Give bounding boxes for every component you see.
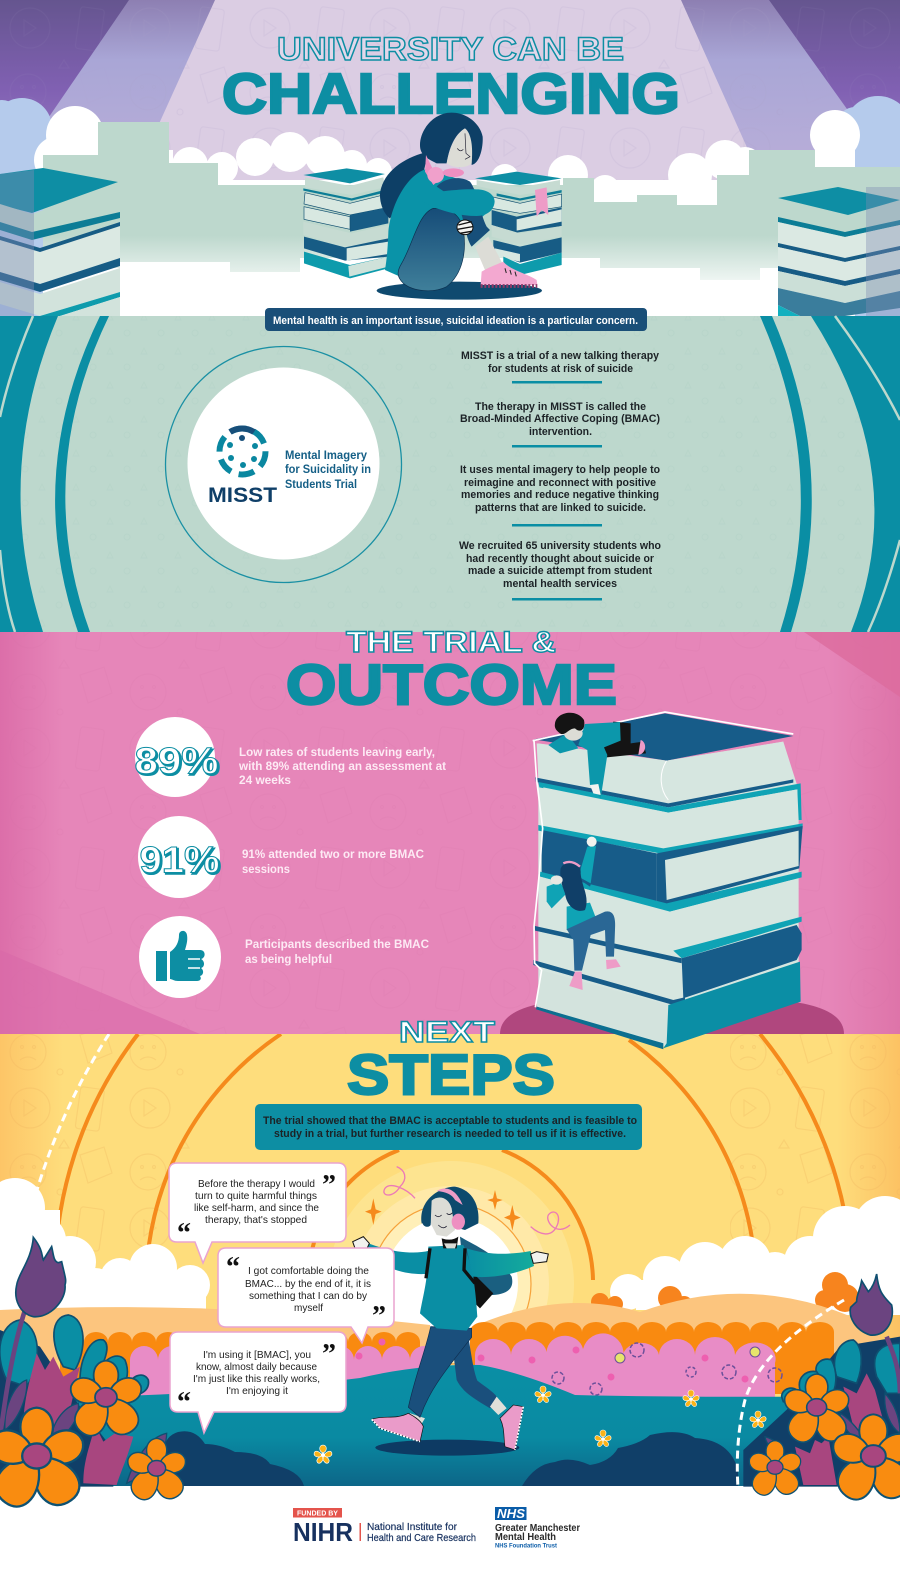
book 5	[533, 925, 802, 1005]
book stack left	[0, 168, 120, 316]
book 4	[540, 872, 802, 958]
callout: mental health banner: Mental health is an important issue, suicidal ideation is a particular concern.	[273, 315, 638, 327]
quote bubble 1: self-harm stopped	[169, 1163, 346, 1263]
sparkles	[365, 1190, 521, 1231]
orange scallops	[60, 1322, 834, 1394]
orange rainbow arcs	[55, 1034, 852, 1290]
quote bubble 1: self-harm stopped: turn to quite harmful things	[195, 1191, 317, 1202]
callout: mental health banner	[265, 308, 647, 331]
rear leg	[453, 1337, 497, 1408]
plants: right corner flowers	[743, 1274, 900, 1506]
text: attendance: 91% attended two or more BMAC	[242, 849, 424, 861]
text block: recruitment: We recruited 65 university students who	[459, 540, 661, 552]
logo tagline: for Suicidality in	[285, 464, 371, 476]
pink squiggles	[384, 1167, 570, 1234]
book 3	[542, 826, 803, 905]
quote bubble 2: doing BMAC alone: BMAC... by the end of it, it is	[245, 1279, 371, 1290]
small meadow flowers	[552, 1343, 782, 1395]
text: low rates: with 89% attending an assessment at	[238, 761, 446, 773]
leaves	[782, 1340, 900, 1402]
text block: what MISST is: for students at risk of suicide	[488, 363, 633, 375]
text: low rates: 24 weeks	[239, 775, 291, 787]
logo: NHS Greater Manchester: Mental Health	[495, 1531, 556, 1543]
panel: next steps background	[0, 1034, 900, 1489]
white footer background	[0, 1486, 900, 1589]
text block: mental imagery: It uses mental imagery to help people to	[460, 464, 660, 476]
outer thin ring	[166, 346, 402, 582]
text: helpful: Participants described the BMAC	[245, 939, 429, 951]
circle with 89%: 89%	[134, 740, 218, 782]
illustration: walking girl with headphones	[353, 1167, 570, 1456]
logo wordmark: MISST	[208, 484, 277, 507]
callout: next steps conclusion: The trial showed that the BMAC is acceptable to students and is feasible to	[263, 1115, 637, 1127]
logo: NIHR funded by	[293, 1508, 476, 1547]
callout: next steps conclusion	[255, 1104, 642, 1150]
pink background	[0, 632, 900, 1034]
logo tagline: Mental Imagery	[285, 450, 368, 462]
quote bubble 1: self-harm stopped: “	[177, 1218, 191, 1249]
callout: next steps conclusion: study in a trial, but further research is needed to tell us if it is effective.	[274, 1128, 626, 1140]
circle with thumbs up icon	[139, 916, 221, 998]
head	[421, 1187, 479, 1230]
quote bubble 3: daily use: know, almost daily because	[196, 1362, 317, 1373]
purple leaves	[5, 1380, 167, 1483]
magenta spiky plants	[23, 1353, 133, 1485]
tulip	[850, 1274, 900, 1393]
central spotlight beam	[120, 0, 775, 210]
backpack	[473, 1273, 493, 1308]
pale city skyline	[43, 122, 900, 280]
hair behind	[460, 1237, 512, 1295]
student lying on top book	[548, 713, 646, 798]
quote bubble 3: daily use: ”	[322, 1339, 336, 1370]
illustration: stack of books with climbing students	[533, 712, 803, 1049]
text block: the BMAC therapy	[460, 401, 660, 438]
book 2	[538, 782, 803, 854]
logo: NHS Greater Manchester	[495, 1507, 580, 1550]
book 6	[536, 962, 801, 1049]
circle with 91%: 91%	[141, 841, 221, 882]
circle with 91%	[138, 816, 221, 898]
white edge highlights	[533, 712, 793, 1007]
shoes	[372, 1413, 423, 1442]
white clouds	[34, 106, 860, 316]
text block: recruitment: had recently thought about suicide or	[466, 553, 655, 565]
logo tagline: Students Trial	[285, 479, 357, 491]
dashed path, lower	[737, 1300, 844, 1488]
right teal arcs	[760, 316, 900, 632]
panel: trial and outcome	[0, 632, 900, 1034]
sun glow rings	[328, 1161, 574, 1407]
logo: NHS Greater Manchester: Greater Manchester	[495, 1522, 580, 1534]
text block: what MISST is: MISST is a trial of a new talking therapy	[461, 350, 660, 362]
clouds	[0, 1178, 900, 1315]
title: challenging: CHALLENGING	[222, 62, 680, 126]
book stack behind girl, right	[475, 172, 562, 275]
yellow background	[0, 1034, 900, 1489]
circle with 89%	[134, 717, 220, 797]
quote bubble 2: doing BMAC alone: something that I can do by	[249, 1291, 368, 1302]
panel: footer	[0, 1486, 900, 1589]
ground shadow	[375, 1440, 519, 1456]
illustration: sitting girl with books	[303, 113, 562, 300]
logo: NHS Greater Manchester: NHS	[497, 1507, 526, 1521]
text: attendance	[242, 849, 424, 876]
book 1	[534, 713, 793, 807]
plants: left corner flowers	[0, 1237, 188, 1514]
quote bubble 1: self-harm stopped: like self-harm, and since the	[194, 1203, 319, 1214]
tulip	[0, 1237, 66, 1437]
quote bubble 1: self-harm stopped: Before the therapy I would	[198, 1179, 315, 1190]
peach hills	[0, 1294, 880, 1360]
plinth shadow under books	[500, 999, 844, 1034]
quote bubble 3: daily use: “	[177, 1387, 191, 1418]
text block: mental imagery: patterns that are linked to suicide.	[475, 502, 646, 514]
dashed path, upper	[34, 1034, 109, 1200]
heading: steps: STEPS	[347, 1043, 555, 1107]
text block: mental imagery: reimagine and reconnect with positive	[464, 477, 656, 489]
quote bubble 1: self-harm stopped: therapy, that's stopped	[205, 1215, 307, 1226]
hands	[353, 1237, 548, 1263]
icon: pink bookmark	[535, 187, 548, 217]
quote bubble 3: daily use	[170, 1332, 346, 1433]
outer spotlight beam	[40, 0, 862, 240]
front leg	[408, 1327, 472, 1417]
panel background	[0, 316, 900, 632]
dark bushes	[164, 1431, 738, 1486]
quote bubble 2: doing BMAC alone: I got comfortable doing the	[248, 1266, 369, 1277]
purple leaves	[765, 1393, 900, 1457]
pink scallops	[130, 1333, 776, 1405]
logo: NIHR funded by: NIHR	[293, 1517, 353, 1547]
quote bubble 3: daily use: I'm using it [BMAC], you	[203, 1350, 311, 1361]
text: low rates: Low rates of students leaving early,	[239, 747, 435, 759]
orange bush patches	[591, 1272, 859, 1314]
socks	[408, 1397, 507, 1427]
magenta spiky plants	[795, 1373, 887, 1485]
quote bubble 3: daily use: I'm enjoying it	[226, 1386, 288, 1397]
quote bubble 2: doing BMAC alone	[218, 1248, 394, 1343]
teal ground	[0, 1365, 900, 1486]
leaves	[0, 1315, 149, 1394]
student climbing the stack	[547, 837, 621, 990]
logo: NIHR funded by: Health and Care Research	[367, 1532, 476, 1544]
left arm	[365, 1243, 429, 1274]
circle with 89%: 89%	[136, 742, 220, 783]
heading: the trial and: THE TRIAL &	[346, 626, 556, 659]
heading: outcome: OUTCOME	[286, 653, 617, 717]
logo circle	[188, 368, 380, 560]
logo tagline	[285, 450, 371, 491]
quote bubble 1: self-harm stopped: ”	[322, 1170, 336, 1201]
heading: next: NEXT	[399, 1016, 495, 1049]
quote bubble 2: doing BMAC alone: “	[226, 1252, 240, 1283]
right arm	[467, 1248, 534, 1277]
text: helpful	[245, 939, 429, 966]
title: university can be: UNIVERSITY CAN BE	[277, 31, 624, 67]
logo: NIHR funded by: National Institute for	[367, 1521, 457, 1533]
text: attendance: sessions	[242, 864, 290, 876]
panel: about the MISST trial	[0, 316, 900, 632]
page backing	[538, 742, 799, 1047]
book stack behind girl, left	[303, 168, 388, 278]
straps	[426, 1248, 475, 1283]
logo: NHS Greater Manchester: NHS Foundation Trust	[495, 1542, 558, 1550]
logo: MISST ring of people	[220, 428, 266, 474]
text block: the BMAC therapy: The therapy in MISST is called the	[475, 401, 646, 413]
ground shadow	[377, 282, 542, 300]
text block: recruitment: mental health services	[503, 578, 617, 590]
panel: university can be challenging header	[0, 0, 900, 316]
text: helpful: as being helpful	[245, 954, 332, 966]
quote bubble 3: daily use: I'm just like this really works,	[193, 1374, 320, 1385]
purple curtain background	[0, 0, 900, 316]
text block: recruitment	[459, 540, 661, 590]
left teal arcs	[0, 316, 109, 632]
book stack right	[778, 187, 900, 316]
blue clouds at the edges	[0, 96, 900, 316]
logo: NIHR funded by: FUNDED BY	[297, 1510, 338, 1518]
torso	[420, 1245, 477, 1331]
text block: mental imagery: memories and reduce negative thinking	[461, 489, 659, 501]
quote bubble 2: doing BMAC alone: ”	[372, 1301, 386, 1332]
girl figure	[380, 113, 537, 291]
circle with 91%: 91%	[140, 840, 220, 880]
ground flowers	[314, 1386, 766, 1463]
text block: mental imagery	[460, 464, 660, 514]
text block: the BMAC therapy: intervention.	[529, 426, 592, 438]
quote bubble 2: doing BMAC alone: myself	[294, 1303, 323, 1314]
text block: the BMAC therapy: Broad-Minded Affective Coping (BMAC)	[460, 413, 660, 425]
text: low rates	[238, 747, 446, 787]
orange flowers	[781, 1374, 852, 1447]
text block: recruitment: made a suicide attempt from student	[468, 565, 652, 577]
orange flowers	[67, 1361, 145, 1441]
text block: what MISST is	[461, 350, 660, 375]
